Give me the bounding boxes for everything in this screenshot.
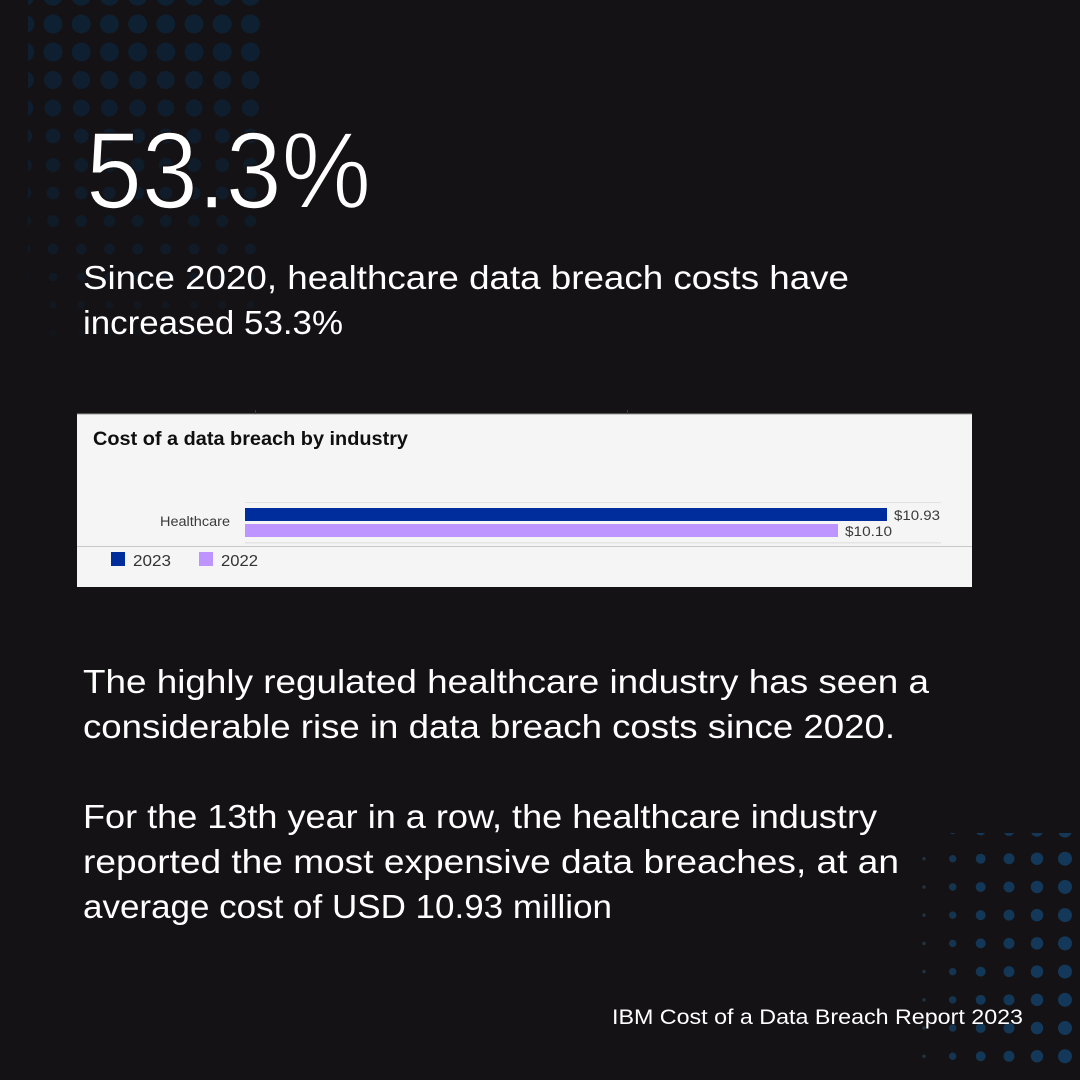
legend: 2023	[133, 553, 171, 570]
body paragraph 2: average cost of USD 10.93 million	[83, 888, 612, 925]
category label: Healthcare	[160, 514, 230, 529]
bar: 2023	[245, 508, 887, 521]
dot pattern: top left	[28, 0, 260, 309]
body paragraph 2: reported the most expensive data breaches, at an	[83, 843, 899, 880]
panel: cost of a data breach by industry chart	[77, 410, 972, 587]
body paragraph 1	[83, 663, 930, 745]
source note: IBM Cost of a Data Breach Report 2023	[612, 1006, 1023, 1029]
value: 2023: $10.93	[894, 507, 940, 523]
legend	[111, 552, 258, 570]
body paragraph 1: considerable rise in data breach costs since 2020.	[83, 708, 895, 745]
value: 2022: $10.10	[845, 523, 892, 539]
body paragraph 2	[83, 798, 899, 925]
body paragraph 1: The highly regulated healthcare industry has seen a	[83, 663, 930, 700]
chart title: Cost of a data breach by industry	[93, 428, 408, 450]
subheading: Since 2020, healthcare data breach costs have	[83, 259, 849, 296]
headline: 53.3%: 53.3%	[86, 110, 371, 232]
bar: 2022	[245, 524, 838, 537]
legend: 2022	[221, 553, 258, 570]
body paragraph 2: For the 13th year in a row, the healthcare industry	[83, 798, 878, 835]
dot pattern: bottom right	[924, 830, 1065, 1058]
subheading	[83, 259, 849, 341]
subheading: increased 53.3%	[83, 304, 343, 341]
